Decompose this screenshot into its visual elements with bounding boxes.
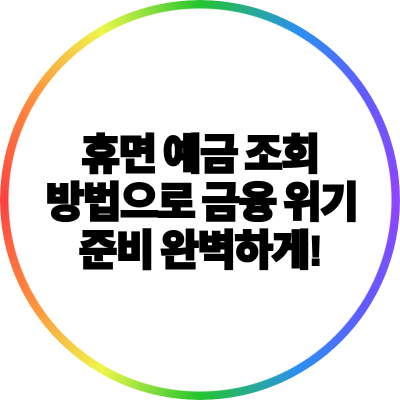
title [46, 131, 357, 274]
title: 휴면 예금 조회 [81, 131, 319, 178]
title: 준비 완벽하게! [79, 227, 321, 274]
title: 방법으로 금융 위기 [46, 179, 357, 226]
